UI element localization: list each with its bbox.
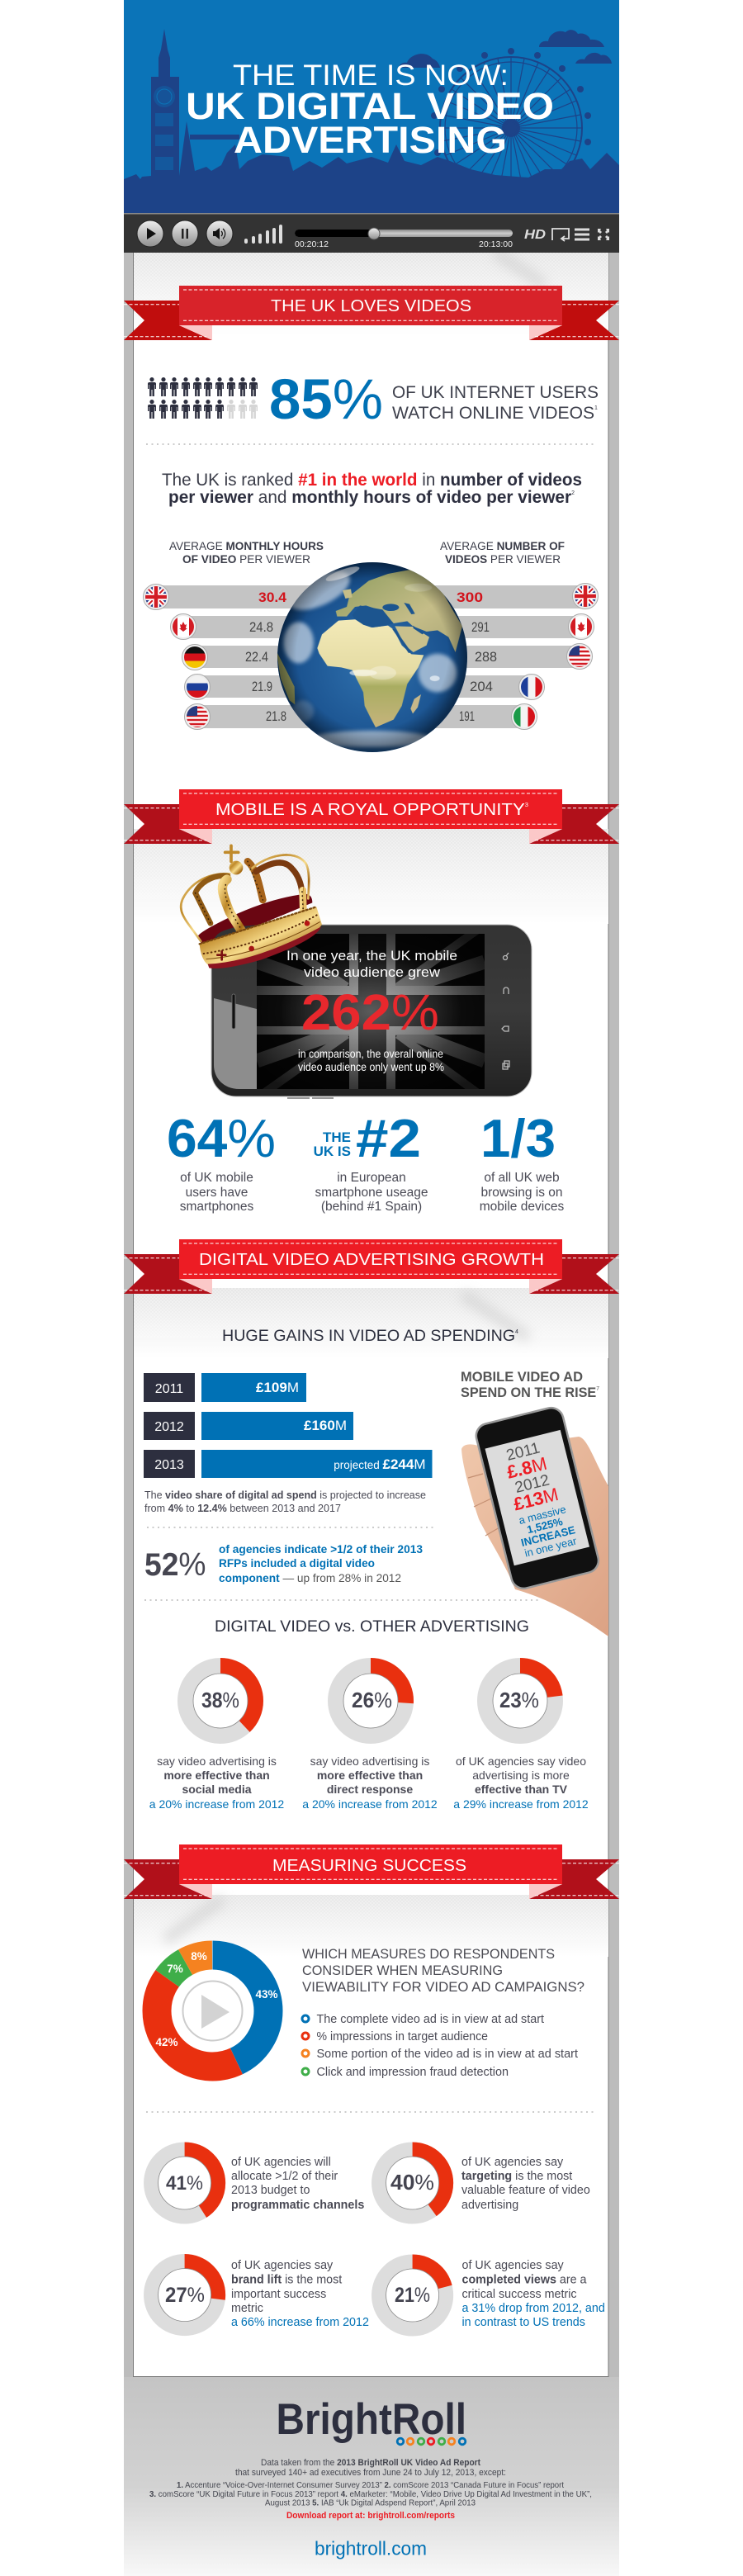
footer: sources: Data taken from the 2013 BrightRoll UK Video Ad Report — [261, 2458, 480, 2468]
icon: play — [183, 1982, 243, 2041]
stat: UK is number 2: #2 — [356, 1108, 421, 1168]
bar chart: videos per viewer — [413, 583, 598, 730]
text: brand lift: metric — [231, 2302, 263, 2315]
footer: sources: that surveyed 140+ ad executives from June 24 to July 12, 2013, except: — [235, 2468, 506, 2478]
heading: which measures — [302, 1946, 584, 1995]
donut: 21 percent — [379, 2261, 446, 2329]
caption: TV — [453, 1754, 589, 1811]
stat: 52 percent of agencies: component — up from 28% in 2012 — [219, 1571, 401, 1584]
text: brand lift: of UK agencies say — [231, 2259, 334, 2272]
caption: direct response — [302, 1754, 438, 1811]
title: ADVERTISING — [234, 119, 507, 161]
text: completed views: completed views are a — [462, 2274, 587, 2287]
phone text: audience growth: video audience grew — [304, 964, 441, 980]
footer background — [124, 2377, 619, 2576]
footer: sources: 3. comScore “UK Digital Future in Focus 2013” report 4. eMarketer: “Mobile, Video Drive Up Digital Ad Investment in the UK”, — [149, 2490, 592, 2499]
chart legend: Some portion of the video ad is in view at ad start — [317, 2048, 578, 2061]
caption: social media: a 20% increase from 2012 — [149, 1797, 284, 1811]
stat caption: 1 — [594, 405, 598, 411]
heading: digital video vs other: DIGITAL VIDEO vs. OTHER ADVERTISING — [215, 1617, 529, 1636]
ribbon: measuring success: MEASURING SUCCESS — [272, 1856, 466, 1875]
chart label: monthly hours: OF VIDEO PER VIEWER — [182, 552, 310, 566]
chart legend: % impressions in target audience — [317, 2030, 488, 2043]
heading: mobile video ad spend: 7 — [596, 1386, 599, 1392]
phone text: audience growth: in comparison, the overall online — [298, 1048, 443, 1060]
bar chart: video ad spend: £160M — [304, 1418, 347, 1433]
ranking statement: per viewer and monthly hours of video per viewer — [168, 488, 574, 507]
donut: 38 percent: 38% — [201, 1688, 239, 1712]
phone screen with union jack — [257, 934, 485, 1089]
text: targeting: valuable feature of video — [461, 2184, 590, 2197]
donut: 38 percent — [185, 1666, 256, 1735]
donut chart: viewability measures: 7% — [167, 1963, 183, 1975]
stat: 64 percent: users have — [186, 1186, 248, 1200]
phone text: mobile spend: 1,525% — [526, 1515, 565, 1536]
illustration: Tower Bridge span — [190, 135, 239, 140]
illustration: London skyline — [124, 121, 619, 214]
illustration: London Eye — [431, 48, 591, 199]
time labels: 20:13:00 — [479, 239, 513, 249]
footer: sources — [149, 2458, 592, 2508]
text: brand lift: brand lift is the most — [231, 2274, 342, 2287]
title: THE TIME IS NOW: — [233, 59, 509, 92]
caption: TV: effective than TV — [475, 1783, 568, 1796]
bar chart: video ad spend: 2012 — [154, 1420, 184, 1434]
heading: which measures: CONSIDER WHEN MEASURING — [302, 1963, 503, 1978]
title — [186, 59, 554, 161]
time labels — [295, 239, 513, 249]
title: UK DIGITAL VIDEO — [186, 85, 554, 127]
header banner — [124, 0, 619, 214]
bar chart: videos per viewer: 204 — [470, 679, 493, 694]
illustration: hand holding phone — [461, 1405, 608, 1636]
text: brand lift: important success — [231, 2288, 326, 2301]
phone text: mobile spend: a massive — [518, 1503, 567, 1527]
text: video share of spend: from 4% to 12.4% between 2013 and 2017 — [144, 1502, 341, 1514]
caption: social media: more effective than — [163, 1769, 270, 1782]
phone text: mobile spend: in one year — [523, 1534, 579, 1560]
chart label: number of videos — [440, 539, 565, 566]
heading: huge gains: HUGE GAINS IN VIDEO AD SPENDING — [222, 1327, 513, 1345]
stat: 85 percent: 85% — [269, 367, 383, 431]
phone side buttons — [502, 953, 509, 1069]
text: video share of spend: The video share of digital ad spend is projected to increase — [144, 1489, 426, 1501]
phone text: audience growth: video audience only went up 8% — [298, 1061, 444, 1073]
caption: social media — [149, 1754, 284, 1811]
stat caption: WATCH ONLINE VIDEOS — [392, 404, 594, 423]
stat caption — [392, 383, 599, 423]
donut: 40 percent — [379, 2149, 446, 2217]
ribbon: the UK loves videos: THE UK LOVES VIDEOS — [271, 296, 471, 315]
heading: which measures: VIEWABILITY FOR VIDEO AD CAMPAIGNS? — [302, 1979, 584, 1995]
chart label: number of videos: VIDEOS PER VIEWER — [445, 552, 561, 566]
bar chart: video ad spend: projected £244M — [334, 1456, 426, 1472]
progress bar — [295, 228, 513, 239]
infographic — [124, 0, 619, 2573]
illustration: royal crown — [181, 845, 322, 968]
text: brand lift — [231, 2259, 369, 2329]
illustration: Big Ben — [151, 29, 179, 176]
text: targeting: targeting is the most — [461, 2170, 572, 2183]
stat: 52 percent of agencies — [144, 1542, 423, 1584]
ranking statement: The UK is ranked #1 in the world in number of videos — [162, 471, 582, 490]
heading: mobile video ad spend: SPEND ON THE RISE — [461, 1385, 603, 1400]
text: programmatic channels: of UK agencies will — [231, 2156, 331, 2169]
ranking statement — [162, 471, 582, 507]
caption: direct response: say video advertising is — [310, 1754, 429, 1768]
caption: direct response: a 20% increase from 2012 — [302, 1797, 438, 1811]
chart legend: Click and impression fraud detection — [317, 2066, 509, 2079]
donut: 27 percent: 27% — [165, 2284, 205, 2307]
footer: sources: 1. Accenture “Voice-Over-Internet Consumer Survey 2013” 2. comScore 2013 “Canada Future in Focus” report — [177, 2481, 564, 2490]
stat: UK is number 2 — [314, 1108, 428, 1214]
icon: volume button — [206, 220, 233, 247]
text: programmatic channels — [231, 2156, 364, 2212]
stat: one third: browsing is on — [480, 1186, 563, 1200]
donut: 23 percent: 23% — [499, 1688, 539, 1712]
caption: direct response: more effective than — [317, 1769, 423, 1782]
phone text: audience growth — [286, 948, 457, 1073]
phone text: mobile spend — [504, 1440, 579, 1560]
icon: screen share — [552, 229, 569, 241]
bar chart: monthly hours per viewer: 21.8 — [266, 708, 286, 724]
stat: UK is number 2: UK IS — [314, 1144, 351, 1159]
ribbon: mobile is a royal opportunity: MOBILE IS A ROYAL OPPORTUNITY — [215, 800, 501, 819]
stat: UK is number 2: (behind #1 Spain) — [321, 1200, 422, 1214]
illustration: globe — [277, 562, 467, 752]
bar chart: video ad spend: 2013 — [154, 1458, 184, 1472]
heading: mobile video ad spend: MOBILE VIDEO AD — [461, 1369, 583, 1385]
text: targeting: of UK agencies say — [461, 2156, 564, 2169]
page side strips — [124, 214, 619, 2576]
icon: menu — [575, 230, 589, 239]
icon: fullscreen — [598, 229, 609, 240]
stat: 52 percent of agencies: RFPs included a digital video — [219, 1556, 375, 1570]
stat: one third: 1/3 — [480, 1108, 556, 1168]
stat: 64 percent: of UK mobile — [180, 1171, 253, 1185]
bar chart: monthly hours per viewer: 30.4 — [258, 590, 287, 605]
video player bar — [124, 213, 619, 253]
text: brand lift: a 66% increase from 2012 — [231, 2316, 369, 2329]
bar chart: video ad spend: 2011 — [155, 1382, 183, 1396]
bar chart: videos per viewer: 288 — [475, 649, 497, 665]
donut: 40 percent: 40% — [390, 2170, 434, 2195]
phone text: mobile spend: £.8M — [504, 1453, 549, 1483]
bar chart: video ad spend: £109M — [256, 1380, 299, 1395]
caption: direct response: direct response — [327, 1783, 413, 1796]
chart legend — [302, 2013, 578, 2079]
stat: 52 percent of agencies: 52% — [144, 1547, 206, 1583]
chart label: monthly hours: AVERAGE MONTHLY HOURS — [169, 539, 324, 552]
text: completed views: a 31% drop from 2012, and — [462, 2302, 605, 2315]
caption: TV: of UK agencies say video — [456, 1754, 586, 1768]
ribbon: digital video advertising growth — [124, 1239, 619, 1294]
stat caption: OF UK INTERNET USERS — [392, 383, 599, 402]
donut: 27 percent — [151, 2261, 218, 2328]
donut chart: viewability measures: 43% — [255, 1988, 278, 2001]
phone text: mobile spend: 2011 — [504, 1440, 542, 1465]
text: completed views — [462, 2259, 605, 2329]
bar chart: videos per viewer: 291 — [471, 619, 490, 635]
caption: social media: say video advertising is — [157, 1754, 277, 1768]
donut: 41 percent — [151, 2149, 218, 2217]
donut chart: viewability measures — [155, 1950, 278, 2067]
ribbon: digital video advertising growth: DIGITAL VIDEO ADVERTISING GROWTH — [199, 1250, 544, 1269]
stat: UK is number 2: THE — [323, 1129, 351, 1145]
chart label: number of videos: AVERAGE NUMBER OF — [440, 539, 565, 552]
bar chart: videos per viewer: 300 — [457, 590, 483, 605]
ribbon: mobile is a royal opportunity — [124, 789, 619, 844]
bar chart: video ad spend — [144, 1373, 433, 1478]
donut: 23 percent — [485, 1666, 555, 1735]
text: programmatic channels: programmatic channels — [231, 2199, 364, 2212]
donut: 41 percent: 41% — [166, 2172, 203, 2195]
heading: huge gains: 4 — [515, 1329, 518, 1335]
heading: mobile video ad spend — [461, 1369, 599, 1400]
donut chart: viewability measures: 8% — [191, 1950, 207, 1963]
stat: one third — [480, 1108, 565, 1214]
stat: one third: mobile devices — [480, 1200, 565, 1214]
heading: which measures: WHICH MEASURES DO RESPONDENTS — [302, 1946, 555, 1962]
time labels: 00:20:12 — [295, 239, 329, 249]
fabric textures — [134, 253, 608, 1957]
bar chart: monthly hours per viewer: 21.9 — [252, 679, 272, 694]
text: targeting: advertising — [461, 2199, 518, 2212]
phone text: mobile spend: 2012 — [513, 1471, 551, 1497]
stat: 52 percent of agencies: of agencies indicate >1/2 of their 2013 — [219, 1542, 423, 1556]
bar chart: monthly hours per viewer — [144, 585, 351, 730]
icon: HD: HD — [524, 228, 547, 242]
text: programmatic channels: allocate >1/2 of their — [231, 2170, 338, 2183]
phone text: audience growth: 262% — [301, 984, 439, 1040]
footer: download link: Download report at: brightroll.com/reports — [286, 2511, 455, 2521]
ribbon: the UK loves videos — [124, 286, 619, 340]
donut: 21 percent: 21% — [395, 2284, 430, 2307]
icon: play button — [137, 220, 163, 247]
bar chart: monthly hours per viewer: 24.8 — [249, 619, 273, 635]
footer: sources: August 2013 5. IAB “Uk Digital Adspend Report”, April 2013 — [265, 2498, 476, 2508]
text: programmatic channels: 2013 budget to — [231, 2184, 310, 2197]
stat: 64 percent — [167, 1108, 276, 1214]
ribbon: mobile is a royal opportunity: 3 — [525, 803, 528, 808]
bar chart: videos per viewer: 191 — [459, 708, 475, 724]
illustration: clouds — [399, 30, 612, 68]
text: completed views: in contrast to US trends — [462, 2316, 585, 2329]
donut: 26 percent — [335, 1666, 406, 1735]
text: completed views: of UK agencies say — [462, 2259, 565, 2272]
phone text: mobile spend: £13M — [511, 1484, 561, 1515]
text: completed views: critical success metric — [462, 2288, 577, 2301]
stat: UK is number 2: in European — [337, 1171, 406, 1185]
stat: 64 percent: smartphones — [180, 1200, 254, 1214]
logo: BrightRoll: BrightRoll — [276, 2395, 466, 2444]
phone text: mobile spend: INCREASE — [520, 1523, 577, 1549]
text: targeting — [461, 2156, 590, 2212]
donut: 26 percent: 26% — [352, 1688, 392, 1712]
caption: TV: a 29% increase from 2012 — [453, 1797, 589, 1811]
stat: UK is number 2: smartphone useage — [315, 1186, 428, 1200]
icon: volume level bars — [244, 225, 282, 244]
phone text: audience growth: In one year, the UK mobile — [286, 948, 457, 964]
ribbon: measuring success — [124, 1844, 619, 1899]
chart legend: The complete video ad is in view at ad start — [317, 2013, 544, 2026]
donut chart: viewability measures: 42% — [155, 2036, 178, 2048]
bar chart: monthly hours per viewer: 22.4 — [245, 649, 268, 665]
caption: social media: social media — [182, 1783, 252, 1796]
illustration: landscape smartphone — [211, 925, 532, 1099]
chart label: monthly hours — [169, 539, 324, 566]
text: video share of spend — [144, 1489, 426, 1514]
caption: TV: advertising is more — [472, 1769, 570, 1782]
ranking statement: 2 — [571, 490, 575, 496]
footer: website: brightroll.com — [315, 2538, 427, 2559]
people pictogram 85 of 100 — [148, 377, 258, 419]
icon: pause button — [172, 220, 198, 247]
stat: one third: of all UK web — [484, 1171, 560, 1185]
stat: 64 percent: 64% — [167, 1108, 276, 1168]
